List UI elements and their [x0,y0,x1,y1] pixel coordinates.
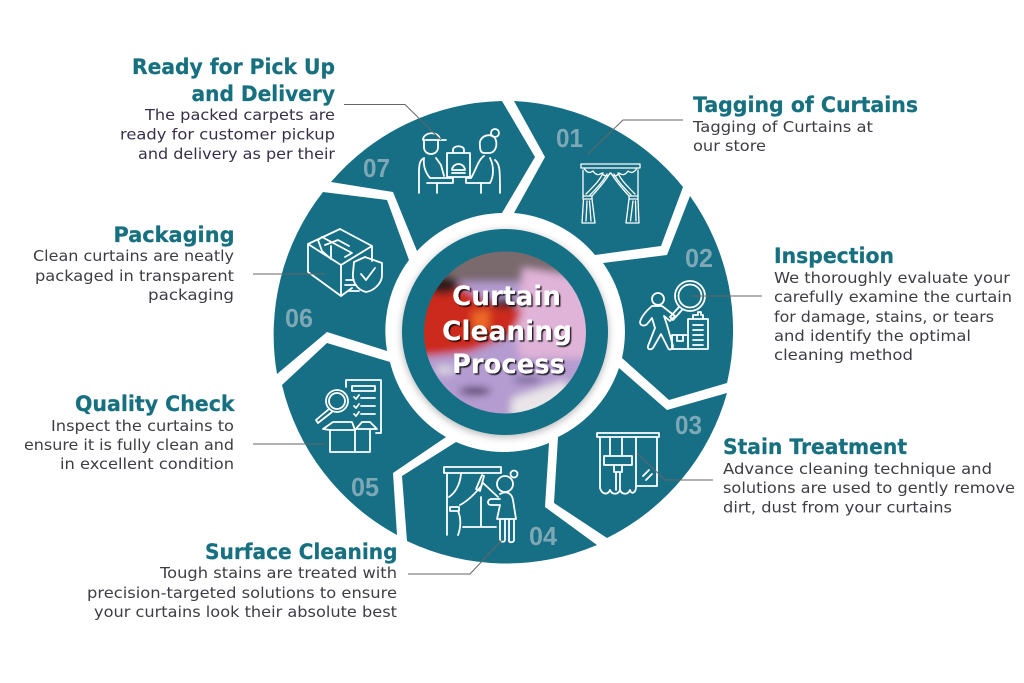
text: tagging of curtains: Tagging of Curtains at [692,118,873,136]
text: packaging [33,223,234,304]
center hub [402,229,608,435]
text: surface cleaning: Surface Cleaning [205,540,398,564]
text: packaging: packaged in transparent [35,267,234,285]
text: stain treatment: Advance cleaning technique and [723,460,992,478]
text: inspection: carefully examine the curtain [774,288,1012,306]
text: surface cleaning: Tough stains are treated with [159,564,397,582]
text: inspection: Inspection [774,244,894,268]
text: surface cleaning: precision-targeted solutions to ensure [87,584,397,602]
segment 01 [514,101,683,255]
leader line 01 [588,120,683,154]
icon: customer pickup [419,129,500,193]
text: packaging: Clean curtains are neatly [33,247,234,265]
segment 04: 04 [529,521,558,551]
segment 02 [603,196,733,400]
text: ready for pick up and delivery: The packed carpets are [144,106,335,124]
infographic: curtain cleaning process [24,57,1014,620]
text: inspection: and identify the optimal [774,327,971,345]
text: packaging: Packaging [114,223,234,247]
text: quality check: Quality Check [75,392,235,416]
text: ready for pick up and delivery: and delivery as per their [138,145,336,163]
text: surface cleaning: your curtains look their absolute best [94,603,397,621]
text: stain treatment: solutions are used to gently remove [723,479,1015,497]
icon: package with shield [308,229,382,296]
center hub: Cleaning [442,316,572,347]
text: quality check: Inspect the curtains to [51,417,234,435]
text: ready for pick up and delivery: Ready for Pick Up [132,55,335,79]
text: ready for pick up and delivery [120,55,336,163]
leader line 06 [253,273,325,275]
segment 06: 06 [285,303,313,333]
leader line 03 [637,453,713,480]
text: tagging of curtains: Tagging of Curtains [693,93,918,117]
text: packaging: packaging [148,286,234,304]
text: surface cleaning [87,540,398,621]
text: quality check [24,392,235,473]
leader line 05 [253,443,325,445]
segment 03: 03 [675,410,702,440]
text: quality check: ensure it is fully clean and [24,436,234,454]
segment 06 [274,192,409,374]
segment 07: 07 [363,153,390,183]
icon: curtain treatment [597,433,659,494]
center hub: Curtain [452,281,561,312]
text: inspection: for damage, stains, or tears [774,308,994,326]
text: inspection: cleaning method [774,346,913,364]
leader line 07 [344,104,441,140]
text: quality check: in excellent condition [60,455,234,473]
segment 02: 02 [685,243,713,273]
text: ready for pick up and delivery: and Delivery [192,82,335,106]
icon: curtains [581,164,640,223]
text: stain treatment: dirt, dust from your curtains [723,498,952,516]
leader line 04 [408,540,502,574]
text: stain treatment [723,435,1015,516]
segment 03 [554,368,727,538]
center hub: Process [452,349,565,380]
text: ready for pick up and delivery: ready for customer pickup [120,126,335,144]
text: inspection: We thoroughly evaluate your [774,269,1011,287]
segment 05: 05 [351,472,379,502]
text: stain treatment: Stain Treatment [723,435,907,459]
text: tagging of curtains: our store [693,137,766,155]
icon: inspection [640,281,708,349]
icon: quality check box [316,380,381,452]
segment 01: 01 [556,123,583,153]
text: inspection [774,244,1012,364]
text: tagging of curtains [692,93,918,155]
segment 04 [402,442,597,563]
icon: surface cleaning [444,467,518,542]
segment 05 [282,343,446,535]
leader line 02 [690,295,762,297]
segment 07 [331,101,535,251]
